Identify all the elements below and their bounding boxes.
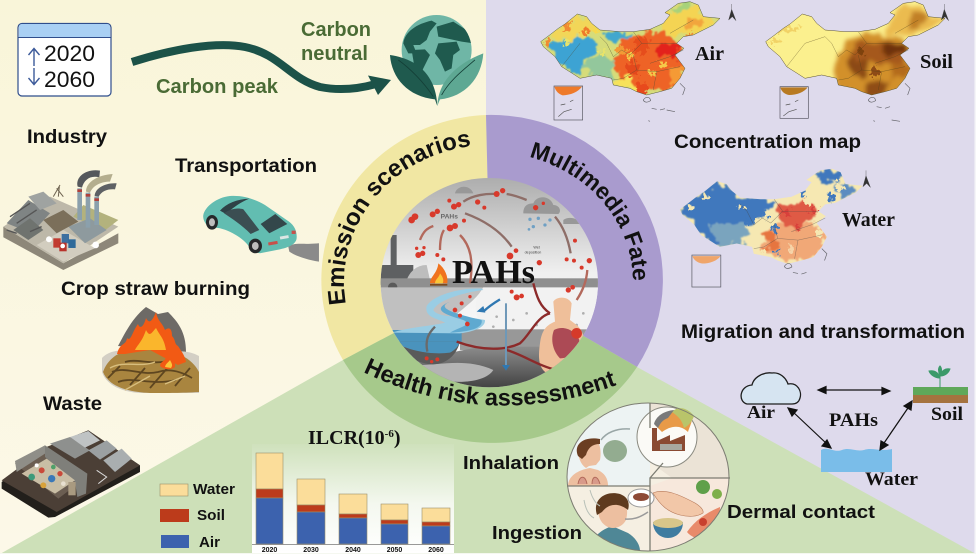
chart title: -6	[385, 428, 394, 440]
axis and years: 2060	[428, 547, 444, 554]
panel: health risk background	[0, 280, 976, 554]
bars 2050	[381, 504, 408, 544]
ring: multimedia fate sector	[486, 115, 663, 367]
axis and years: 2030	[303, 547, 319, 554]
axis and years: 2040	[345, 547, 361, 554]
inhalation person	[568, 468, 608, 486]
left land	[380, 287, 483, 337]
clouds	[455, 187, 583, 224]
ingestion person	[598, 527, 640, 550]
ground band	[380, 278, 600, 288]
chart title: ILCR(10	[308, 427, 385, 449]
axis and years: 2050	[387, 547, 402, 554]
map: air concentration	[537, 0, 736, 121]
label: PAHs: PAHs	[829, 410, 878, 431]
bars 2060	[422, 508, 450, 544]
label: carbon peak: Carbon peak	[156, 76, 279, 98]
label: water: Water	[865, 469, 919, 490]
deep layer	[412, 346, 574, 388]
flame	[430, 263, 447, 283]
label: ingestion: Ingestion	[492, 522, 582, 543]
icon: burning straw pile	[102, 307, 199, 393]
red transport arrows	[457, 283, 557, 370]
legend: Soil	[197, 508, 225, 524]
river	[392, 288, 485, 333]
small labels: PAHs	[441, 214, 458, 221]
icon: waste treatment plant	[2, 430, 140, 518]
panel: multimedia fate background	[486, 0, 976, 554]
label: carbon neutral: Carbon	[301, 19, 371, 41]
label: migration and transformation: Migration and transformation	[681, 321, 965, 343]
bowl	[653, 522, 683, 538]
label: dermal contact: Dermal contact	[727, 501, 875, 522]
map: water concentration	[676, 167, 870, 287]
label: inhalation: Inhalation	[463, 452, 559, 473]
bars 2040	[339, 494, 367, 544]
soil right	[476, 287, 600, 330]
central illustration: PAHs environmental cycle: deposition	[525, 250, 541, 254]
exposure pathways circle	[567, 403, 730, 551]
label: soil map: Soil	[920, 51, 953, 73]
ring title: health risk assessment: Health risk assessment	[364, 358, 616, 406]
label: water map: Water	[842, 209, 895, 231]
red particles	[408, 188, 592, 363]
grey layer	[460, 329, 600, 350]
soil dots	[492, 312, 585, 328]
water body	[387, 330, 462, 343]
panel: emission scenarios background	[0, 0, 486, 554]
map: soil concentration	[762, 0, 949, 121]
label: soil: Soil	[931, 404, 963, 425]
diagram: multimedia exchange	[741, 366, 968, 490]
legend: Water	[193, 482, 235, 498]
legend: Air	[199, 535, 220, 551]
calendar icon 2020 to 2060: 2060	[44, 67, 95, 92]
label: waste: Waste	[43, 393, 102, 415]
label: transportation: Transportation	[175, 156, 317, 177]
truck	[388, 282, 398, 288]
central illustration: PAHs environmental cycle: Wet	[533, 246, 540, 250]
icon: car with exhaust	[203, 196, 319, 262]
label: industry: Industry	[27, 126, 107, 148]
axis and years	[252, 544, 454, 554]
icon: soil with plant	[913, 366, 968, 403]
calendar icon 2020 to 2060	[18, 24, 111, 96]
label: air: Air	[747, 402, 775, 422]
icon: water block	[821, 449, 892, 472]
ring title: emission scenarios: Emission scenarios	[328, 134, 470, 304]
arrow: carbon peak to carbon neutral	[132, 45, 391, 95]
central illustration: PAHs environmental cycle	[380, 177, 600, 390]
ring title: multimedia fate: Multimedia Fate	[530, 142, 647, 280]
label: crop straw burning: Crop straw burning	[61, 278, 250, 300]
icon: globe with leaves	[390, 15, 483, 106]
label: carbon neutral	[301, 19, 371, 65]
axis and years: 2020	[262, 547, 277, 554]
inner factory circle	[637, 407, 697, 467]
ring: emission scenarios sector	[321, 115, 490, 360]
legend	[160, 482, 235, 551]
label: concentration map: Concentration map	[674, 132, 861, 153]
chart: ILCR stacked bars	[252, 427, 454, 554]
human body	[539, 298, 584, 377]
particle cloud	[603, 440, 627, 462]
rain	[528, 217, 552, 231]
bars 2020	[256, 453, 283, 544]
icon: cloud air	[741, 373, 800, 404]
chart title: )	[394, 427, 401, 449]
label: air map: Air	[695, 43, 724, 65]
title: PAHs: PAHs	[452, 254, 535, 291]
label: carbon neutral: neutral	[301, 43, 368, 65]
factory	[381, 235, 413, 285]
arrows between media	[788, 386, 912, 450]
calendar icon 2020 to 2060: 2020	[44, 41, 95, 66]
ring: health risk sector	[343, 282, 637, 443]
dermal hand	[653, 491, 703, 516]
bars 2030	[297, 479, 325, 544]
icon: industrial plant	[3, 170, 118, 270]
